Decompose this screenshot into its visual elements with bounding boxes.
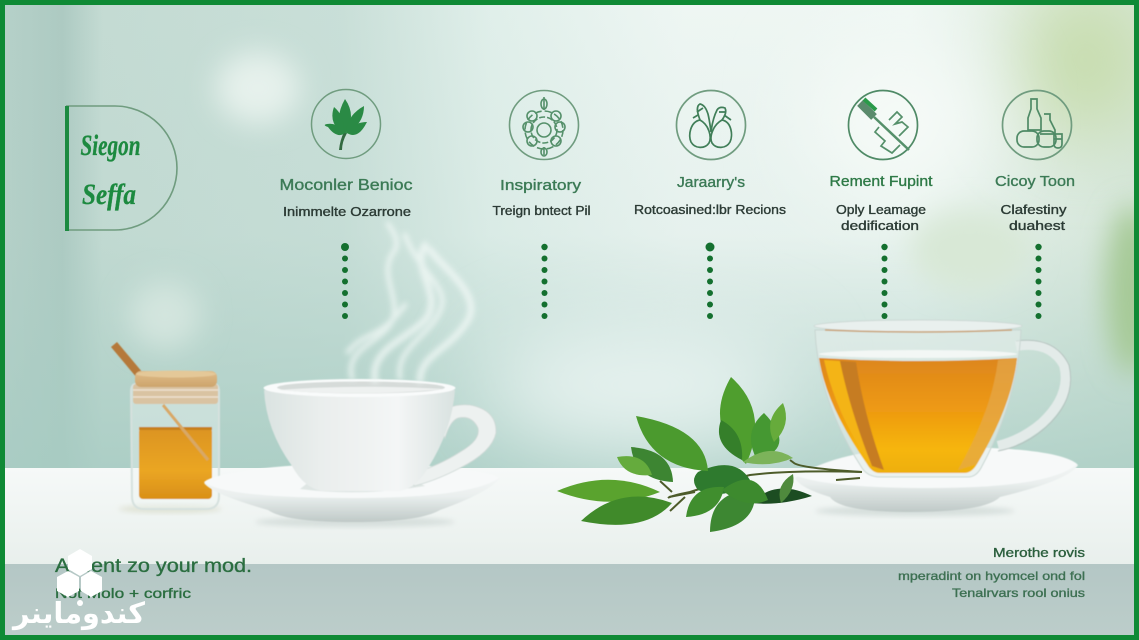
icon: knot mandala xyxy=(510,90,578,160)
subheading: Inimmelte Ozarrone xyxy=(283,205,411,219)
watermark logo xyxy=(11,549,145,630)
honey jar xyxy=(111,342,222,513)
bottom left caption xyxy=(55,555,252,601)
stems xyxy=(660,460,862,511)
icon: paired hands xyxy=(676,90,746,160)
saucer xyxy=(815,506,1015,516)
icon: bottles and bowls xyxy=(1002,90,1072,160)
table front band xyxy=(5,564,1134,635)
saucer xyxy=(255,517,455,527)
dark under leaves xyxy=(752,488,812,504)
subheading: Clafestiny xyxy=(1000,203,1067,217)
white cup and saucer xyxy=(204,379,500,527)
icon: whisk and sprig xyxy=(848,90,918,160)
watermark text: کندوماینر xyxy=(11,596,145,630)
logo text xyxy=(80,129,140,211)
feature column 1 xyxy=(280,90,413,219)
subheading: Rotcoasined:lbr Recions xyxy=(634,203,786,217)
glass body xyxy=(815,330,1021,477)
feature column 4 xyxy=(830,90,933,233)
logo text: Seffa xyxy=(82,178,136,211)
heading: Rement Fupint xyxy=(830,173,933,190)
icon: leaf sprig xyxy=(312,90,380,158)
heading: Moconler Benioc xyxy=(280,177,413,194)
logo badge xyxy=(65,106,177,231)
heading: Cicoy Toon xyxy=(995,173,1075,190)
feature column 3 xyxy=(634,90,786,217)
dotted connector 5 xyxy=(1035,244,1042,319)
feature column 5 xyxy=(995,90,1075,233)
logo text: Siegon xyxy=(80,129,140,162)
handle xyxy=(412,405,496,486)
heading: Jaraarry's xyxy=(677,175,745,191)
tea xyxy=(819,358,1017,473)
bottom right caption: mperadint on hyomcel ond fol xyxy=(898,569,1085,583)
bottom right caption xyxy=(898,546,1085,600)
cup body xyxy=(264,390,455,491)
glass tea cup and saucer xyxy=(795,320,1078,516)
subheading: Treign bntect Pil xyxy=(492,204,590,218)
subheading: Oply Leamage xyxy=(836,203,926,217)
dotted connector 2 xyxy=(541,244,548,319)
heading: Inspiratory xyxy=(500,177,582,194)
glass handle xyxy=(998,345,1066,446)
table top xyxy=(5,468,1134,566)
subheading line 2: duahest xyxy=(1009,219,1066,233)
tea sprig xyxy=(557,377,862,532)
steam xyxy=(348,224,471,380)
rim xyxy=(814,320,1022,332)
bottom left caption: Accent zo your mod. xyxy=(55,555,252,577)
bottom left caption: Not Molo + corfric xyxy=(55,585,191,601)
bottom right caption: Merothe rovis xyxy=(993,546,1085,560)
dotted connector 3 xyxy=(706,242,714,319)
dotted connector 1 xyxy=(341,243,349,319)
bottom right caption: Tenalrvars rool onius xyxy=(952,586,1085,600)
feature column 2 xyxy=(492,90,590,218)
leaves xyxy=(557,480,660,502)
background wall xyxy=(0,0,1139,470)
dotted connector 4 xyxy=(881,244,888,319)
subheading line 2: dedification xyxy=(841,219,919,233)
icon: hexagons xyxy=(57,549,102,606)
